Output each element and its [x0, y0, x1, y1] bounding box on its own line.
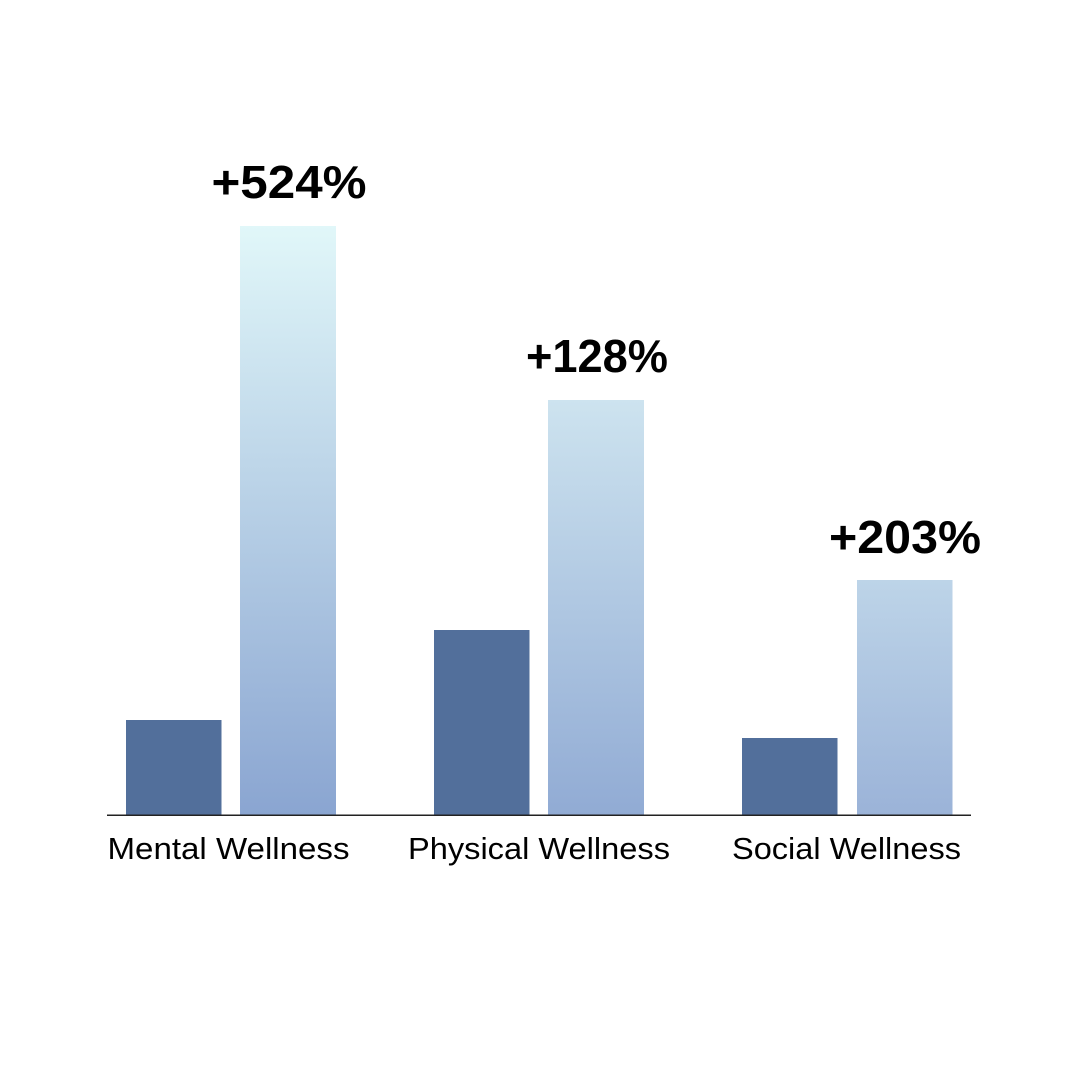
- bar: Mental Wellness before: [126, 720, 222, 815]
- group: Social Wellness: [732, 511, 981, 866]
- label: Mental Wellness: Mental Wellness: [108, 831, 350, 866]
- bar: Mental Wellness after: [240, 226, 336, 815]
- value: +128%: +128%: [526, 330, 668, 382]
- label: Social Wellness: Social Wellness: [732, 831, 961, 866]
- axis baseline: [107, 814, 971, 816]
- bar: Physical Wellness before: [434, 630, 530, 815]
- bar: Social Wellness before: [742, 738, 838, 815]
- label: Physical Wellness: Physical Wellness: [408, 831, 670, 866]
- group: Mental Wellness: [108, 156, 366, 866]
- bar: Physical Wellness after: [548, 400, 644, 815]
- value: +524%: +524%: [212, 156, 366, 208]
- group: Physical Wellness: [408, 330, 670, 866]
- value: +203%: +203%: [829, 511, 981, 563]
- bar: Social Wellness after: [857, 580, 952, 815]
